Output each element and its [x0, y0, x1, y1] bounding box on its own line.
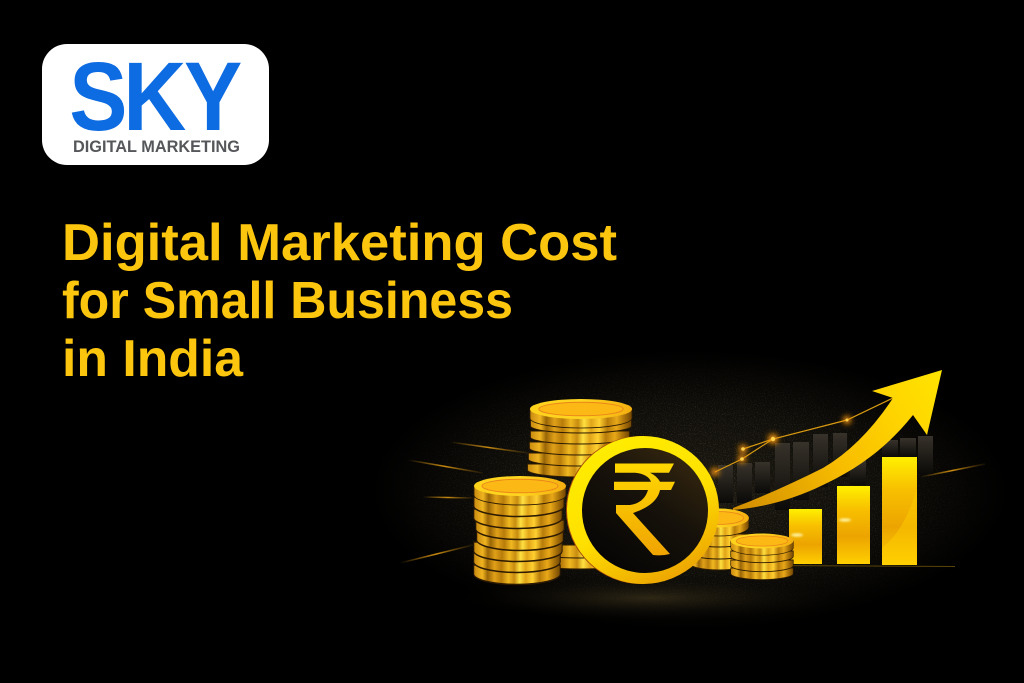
title: in India	[62, 330, 244, 388]
coin stack: small front	[731, 534, 793, 580]
icon: rupee symbol	[614, 464, 675, 555]
background	[403, 366, 979, 614]
light streaks	[400, 442, 985, 563]
rupee coin	[566, 436, 719, 584]
coin stack: back	[527, 399, 632, 569]
logo tagline: DIGITAL MARKETING	[73, 138, 240, 156]
title: Digital Marketing Cost	[62, 214, 617, 272]
trend line with glowing points	[711, 398, 893, 476]
floor line	[770, 566, 955, 567]
title	[62, 214, 617, 388]
logo wordmark: SKY: SKY	[69, 42, 242, 151]
illustration: coins and growth chart	[400, 370, 985, 622]
growth arrow	[733, 370, 942, 510]
coin stack: left	[474, 476, 566, 584]
floor glow	[440, 574, 860, 622]
background faded chart bars	[718, 433, 933, 510]
title: for Small Business	[62, 272, 513, 330]
logo badge	[42, 42, 269, 165]
coin stack: right behind rupee coin	[689, 508, 749, 570]
rising bars	[789, 457, 917, 565]
